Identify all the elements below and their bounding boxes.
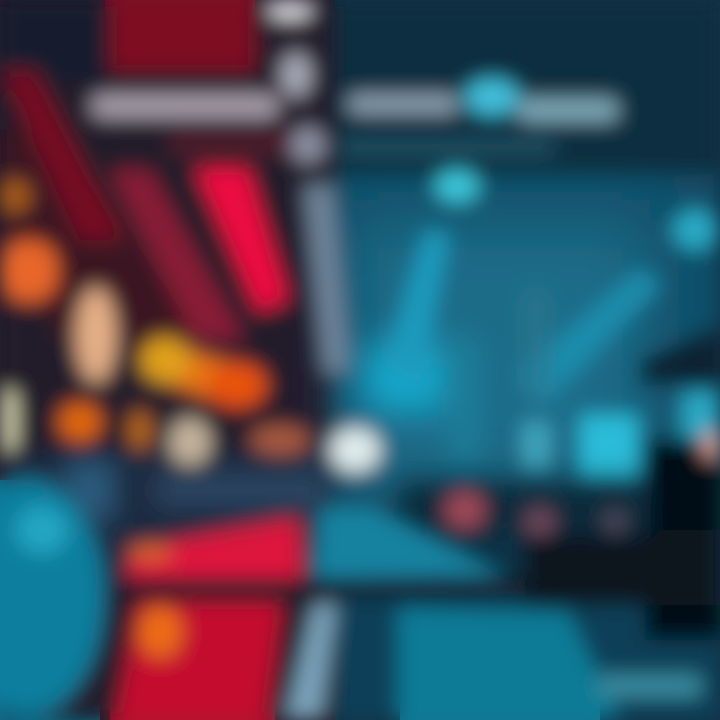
divider: dark horizontal band bbox=[115, 578, 525, 595]
panel: bottom-left teal sphere bbox=[0, 479, 104, 715]
panel: bottom red road bbox=[116, 518, 302, 720]
panel: central pale column bbox=[270, 0, 380, 472]
panel: right teal city lights bbox=[350, 170, 720, 490]
panel: warm neon lights on left bbox=[0, 179, 325, 520]
heading: blurred title band bbox=[92, 79, 618, 154]
panel: bottom teal road bbox=[286, 508, 702, 720]
panel: top maroon and diagonal reds bbox=[0, 0, 300, 340]
panel: dark foreground silhouette bbox=[400, 325, 720, 640]
